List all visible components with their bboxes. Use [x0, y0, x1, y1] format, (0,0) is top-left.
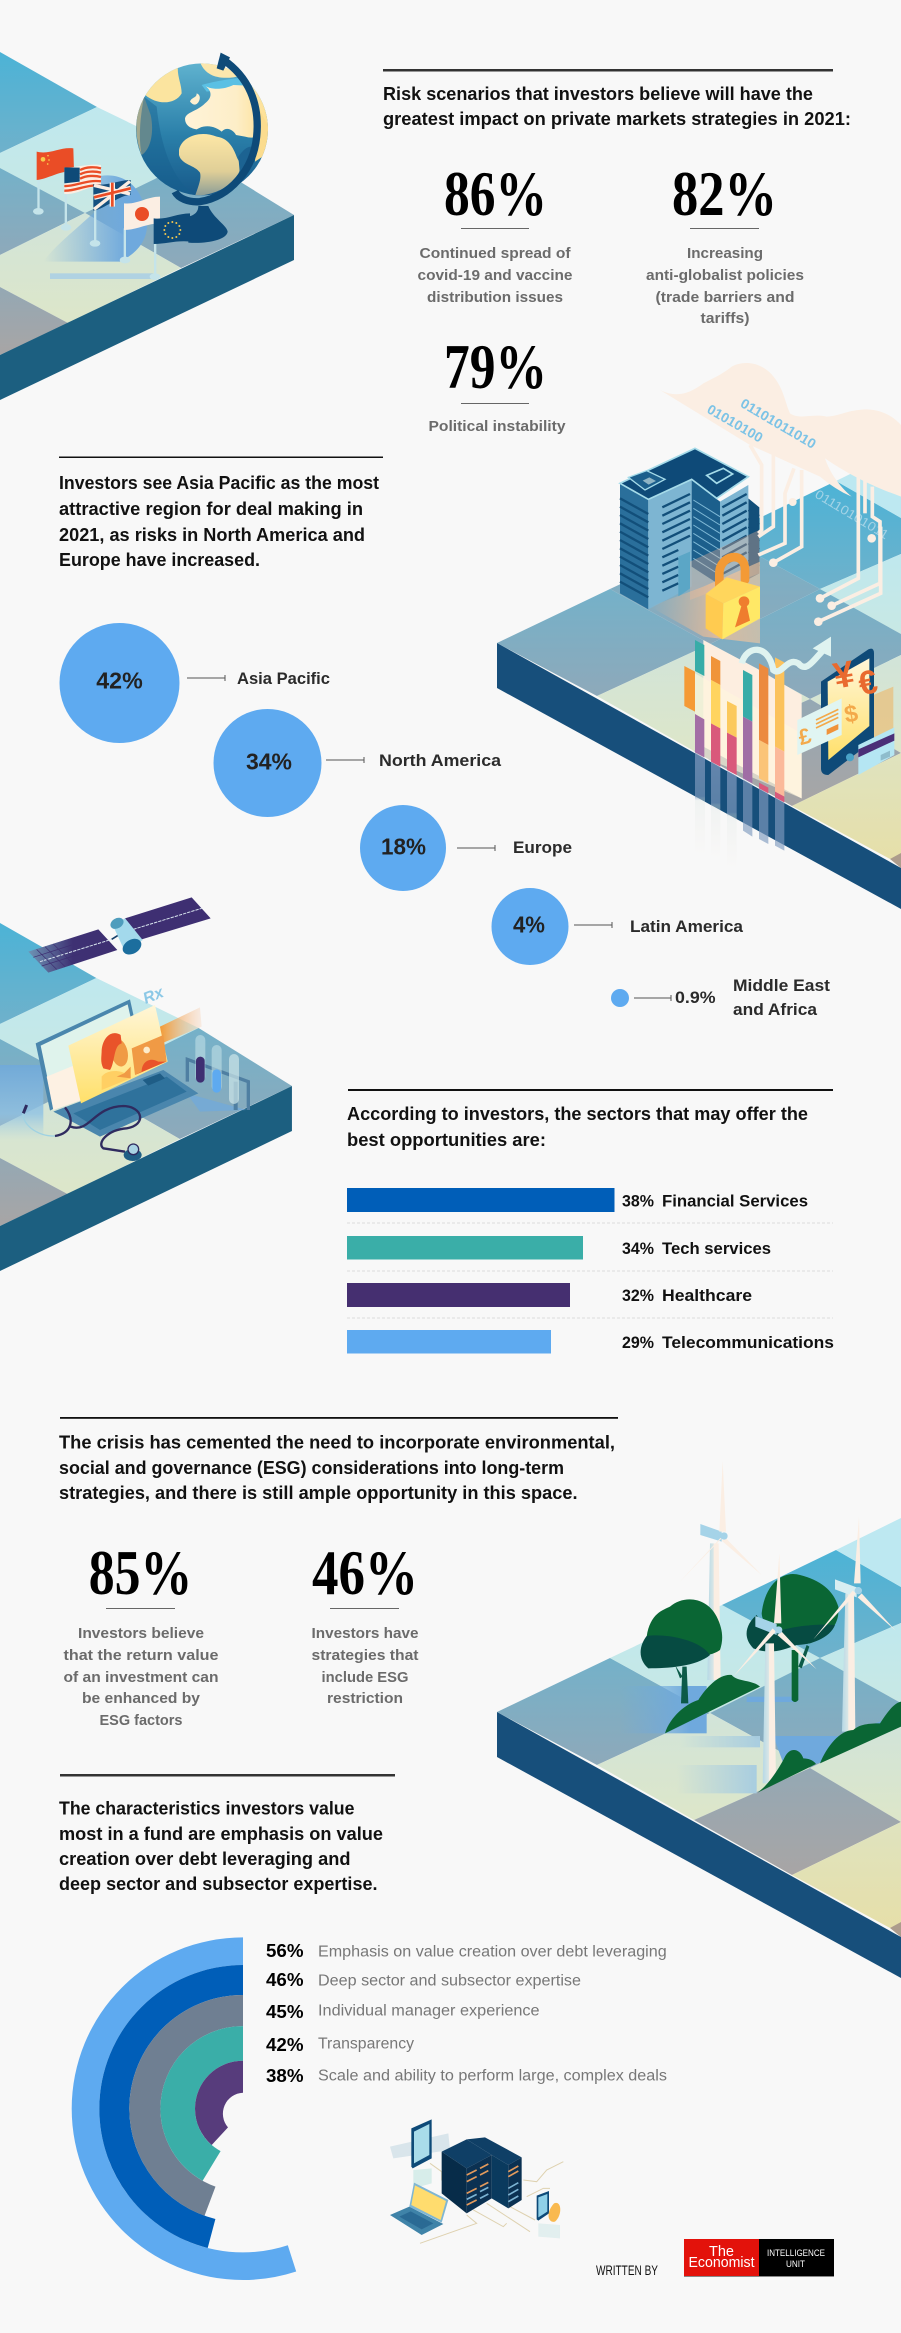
flag: China: [33, 148, 74, 215]
heading: characteristics: creation over debt leveraging and: [59, 1849, 350, 1869]
stat: 46%: strategies that: [312, 1648, 419, 1664]
bar: Healthcare: Healthcare: [662, 1287, 752, 1305]
flag: United Kingdom: [90, 180, 131, 247]
bar: Tech services: [347, 1236, 771, 1260]
heading: characteristics: [59, 1774, 395, 1894]
stat: 86%: distribution issues: [427, 290, 563, 306]
bubble: Europe 18%: 18%: [381, 834, 426, 860]
legend item: 45%: [266, 2001, 540, 2022]
panel: globe and flags illustration: [0, 52, 294, 400]
heading: sectors: best opportunities are:: [347, 1130, 546, 1150]
stat: 85%: [64, 1537, 218, 1729]
bubble: Middle East and Africa 0.9%: Middle East: [733, 977, 831, 995]
stat: 46%: [312, 1537, 419, 1707]
bar chart: sectors: [347, 1188, 834, 1354]
heading: risk scenarios: greatest impact on private markets strategies in 2021:: [383, 109, 851, 129]
flag: United States: [61, 165, 101, 231]
heading: asia pacific: 2021, as risks in North America and: [59, 525, 365, 545]
stat: 79%: [428, 331, 566, 435]
stat: 82%: anti-globalist policies: [646, 268, 804, 284]
icon: tree 2: [747, 1574, 839, 1702]
stat: 82%: 82%: [672, 158, 777, 229]
icon: wind turbine 1: [678, 1461, 762, 1680]
bubble: Europe 18%: Europe: [513, 839, 572, 857]
icon: data cloud: 01101011010: [738, 396, 819, 452]
heading: characteristics: most in a fund are emphasis on value: [59, 1824, 383, 1844]
legend item: 56%: Emphasis on value creation over debt leveraging: [318, 1944, 667, 1960]
heading: asia pacific: attractive region for deal making in: [59, 499, 363, 519]
radial bar chart: [72, 1937, 296, 2280]
icon: circuit traces: [750, 445, 881, 626]
stat: 85%: ESG factors: [100, 1713, 182, 1729]
heading: risk scenarios: [383, 69, 851, 129]
icon: growth arrow: [742, 637, 831, 671]
bar: Financial Services: 38%: [622, 1192, 654, 1210]
stat: 85%: be enhanced by: [82, 1691, 200, 1707]
icon: video call card: [68, 1005, 168, 1103]
stat: 82%: Increasing: [687, 246, 763, 262]
bar: Telecommunications: 29%: [622, 1334, 654, 1352]
stat: 85%: 85%: [89, 1537, 192, 1608]
heading: ESG: strategies, and there is still ample opportunity in this space.: [59, 1483, 578, 1503]
icon: laptop: [36, 999, 198, 1137]
bubble: Latin America 4%: [492, 888, 744, 965]
icon: hill 2: [758, 1750, 816, 1793]
legend item: 38%: [266, 2065, 667, 2086]
bubble: Middle East and Africa 0.9%: [611, 977, 831, 1019]
icon: servers and devices: [390, 2119, 563, 2243]
legend item: 42%: 42%: [266, 2034, 304, 2055]
icon: data cloud: 01010100: [704, 402, 766, 446]
icon: tree 1: [641, 1599, 722, 1703]
platform: globe: [0, 52, 294, 400]
bubble: North America 34%: North America: [379, 752, 502, 770]
icon: test tubes: [187, 1035, 248, 1110]
stat: 86%: Continued spread of: [420, 246, 571, 262]
platform: healthcare: [0, 923, 292, 1271]
bubble: Europe 18%: [360, 805, 572, 891]
legend item: 46%: 46%: [266, 1969, 304, 1990]
platform: wind farm: [497, 1518, 901, 1978]
legend item: 38%: 38%: [266, 2065, 304, 2086]
bar: Tech services: Tech services: [662, 1240, 771, 1258]
stat: 86%: [418, 158, 572, 306]
stat: 82%: tariffs): [700, 311, 750, 327]
footer: written by: WRITTEN BY: [596, 2263, 658, 2278]
bubble: Middle East and Africa 0.9%: 0.9%: [675, 989, 716, 1007]
legend item: 42%: [266, 2034, 414, 2055]
icon: flags: [33, 148, 191, 280]
bar: Telecommunications: Telecommunications: [662, 1334, 834, 1352]
heading: sectors: According to investors, the sectors that may offer the: [347, 1104, 808, 1124]
stat: 82%: (trade barriers and: [656, 290, 794, 306]
icon: wind turbine 3: [813, 1517, 896, 1732]
heading: ESG: social and governance (ESG) considerations into long-term: [59, 1458, 564, 1478]
legend item: 56%: [266, 1940, 667, 1961]
phone: [537, 2191, 549, 2221]
logo: The Economist Intelligence Unit: Economist: [688, 2255, 754, 2271]
heading: risk scenarios: Risk scenarios that investors believe will have the: [383, 84, 813, 104]
tablet: [411, 2119, 432, 2168]
pie icon: [549, 2203, 560, 2222]
legend item: 46%: [266, 1969, 581, 1990]
bar: Tech services: 34%: [622, 1240, 654, 1258]
stat: 46%: restriction: [327, 1691, 403, 1707]
bubble: Middle East and Africa 0.9%: and Africa: [733, 1001, 818, 1019]
legend item: 38%: Scale and ability to perform large, complex deals: [318, 2068, 667, 2084]
heading: ESG: [59, 1417, 618, 1503]
stat: 85%: of an investment can: [64, 1670, 218, 1686]
panel: healthcare illustration: [0, 897, 292, 1271]
bubble: Latin America 4%: 4%: [513, 912, 545, 938]
bar: Financial Services: [347, 1188, 808, 1212]
bubble: North America 34%: [214, 709, 502, 817]
stat: 46%: 46%: [312, 1537, 418, 1608]
icon: hill 3: [820, 1702, 901, 1763]
heading: asia pacific: [59, 456, 383, 570]
bar chart graphic: [684, 637, 894, 870]
stat: 79%: Political instability: [428, 419, 566, 435]
logo: The Economist Intelligence Unit: INTELLIGENCE: [767, 2248, 825, 2258]
heading: characteristics: The characteristics investors value: [59, 1798, 354, 1818]
legend item: 46%: Deep sector and subsector expertise: [318, 1972, 581, 1990]
icon: phone and currency: £: [796, 723, 814, 750]
bubble: Latin America 4%: Latin America: [630, 918, 744, 936]
icon: data cloud: 01110101011: [812, 487, 891, 542]
bubble: Asia Pacific 42%: Asia Pacific: [237, 670, 330, 688]
heading: asia pacific: Europe have increased.: [59, 550, 260, 570]
logo: The Economist Intelligence Unit: The: [709, 2244, 734, 2260]
icon: stethoscope: [23, 1105, 142, 1161]
stat: 82%: [646, 158, 804, 327]
heading: sectors: [347, 1089, 833, 1150]
circuit lines: [420, 2162, 563, 2243]
stat: 46%: Investors have: [312, 1626, 418, 1642]
flag: Japan: [120, 197, 160, 263]
platform: city: [497, 449, 901, 909]
icon: padlock: [706, 557, 760, 639]
stat: 85%: Investors believe: [78, 1626, 204, 1642]
stat: 79%: 79%: [444, 331, 547, 402]
heading: asia pacific: Investors see Asia Pacific as the most: [59, 473, 379, 493]
panel: data security and finance illustration: [497, 363, 901, 909]
bubble: Asia Pacific 42%: 42%: [96, 668, 143, 694]
panel: wind farm illustration: [497, 1461, 901, 1978]
bubble: Asia Pacific 42%: [60, 623, 330, 743]
stat: 86%: covid-19 and vaccine: [418, 268, 572, 284]
icon: data cloud: [660, 363, 901, 542]
logo: The Economist Intelligence Unit: [684, 2239, 834, 2277]
chart legend: [266, 1940, 667, 2086]
legend item: 42%: Transparency: [318, 2036, 414, 2052]
icon: phone and currency: $: [842, 700, 860, 729]
icon: phone and currency: [796, 649, 894, 775]
icon: phone and currency: €: [855, 663, 881, 703]
icon: hill 1: [665, 1675, 760, 1733]
label: Rx: Rx: [141, 984, 167, 1008]
stat: 86%: 86%: [444, 158, 547, 229]
icon: phone and currency: ¥: [830, 653, 858, 697]
icon: wind turbine 2: [733, 1553, 817, 1783]
legend item: 45%: 45%: [266, 2001, 304, 2022]
legend item: 56%: 56%: [266, 1940, 304, 1961]
heading: ESG: The crisis has cemented the need to incorporate environmental,: [59, 1432, 615, 1452]
icon: globe on stand: [43, 53, 270, 279]
bubble: North America 34%: 34%: [246, 748, 292, 774]
bar: Healthcare: [347, 1283, 752, 1307]
server racks: [442, 2137, 522, 2213]
bar: Financial Services: Financial Services: [662, 1192, 808, 1210]
flag: European Union: [150, 213, 191, 280]
bar: Healthcare: 32%: [622, 1287, 654, 1305]
icon: satellite: [28, 897, 211, 973]
stat: 85%: that the return value: [64, 1648, 218, 1664]
heading: characteristics: deep sector and subsector expertise.: [59, 1874, 378, 1894]
icon: office building: [620, 448, 759, 609]
stat: 46%: include ESG: [322, 1670, 408, 1686]
laptop: [390, 2183, 448, 2235]
logo: The Economist Intelligence Unit: UNIT: [786, 2259, 805, 2269]
legend item: 45%: Individual manager experience: [318, 2002, 540, 2020]
bar: Telecommunications: [347, 1330, 834, 1354]
